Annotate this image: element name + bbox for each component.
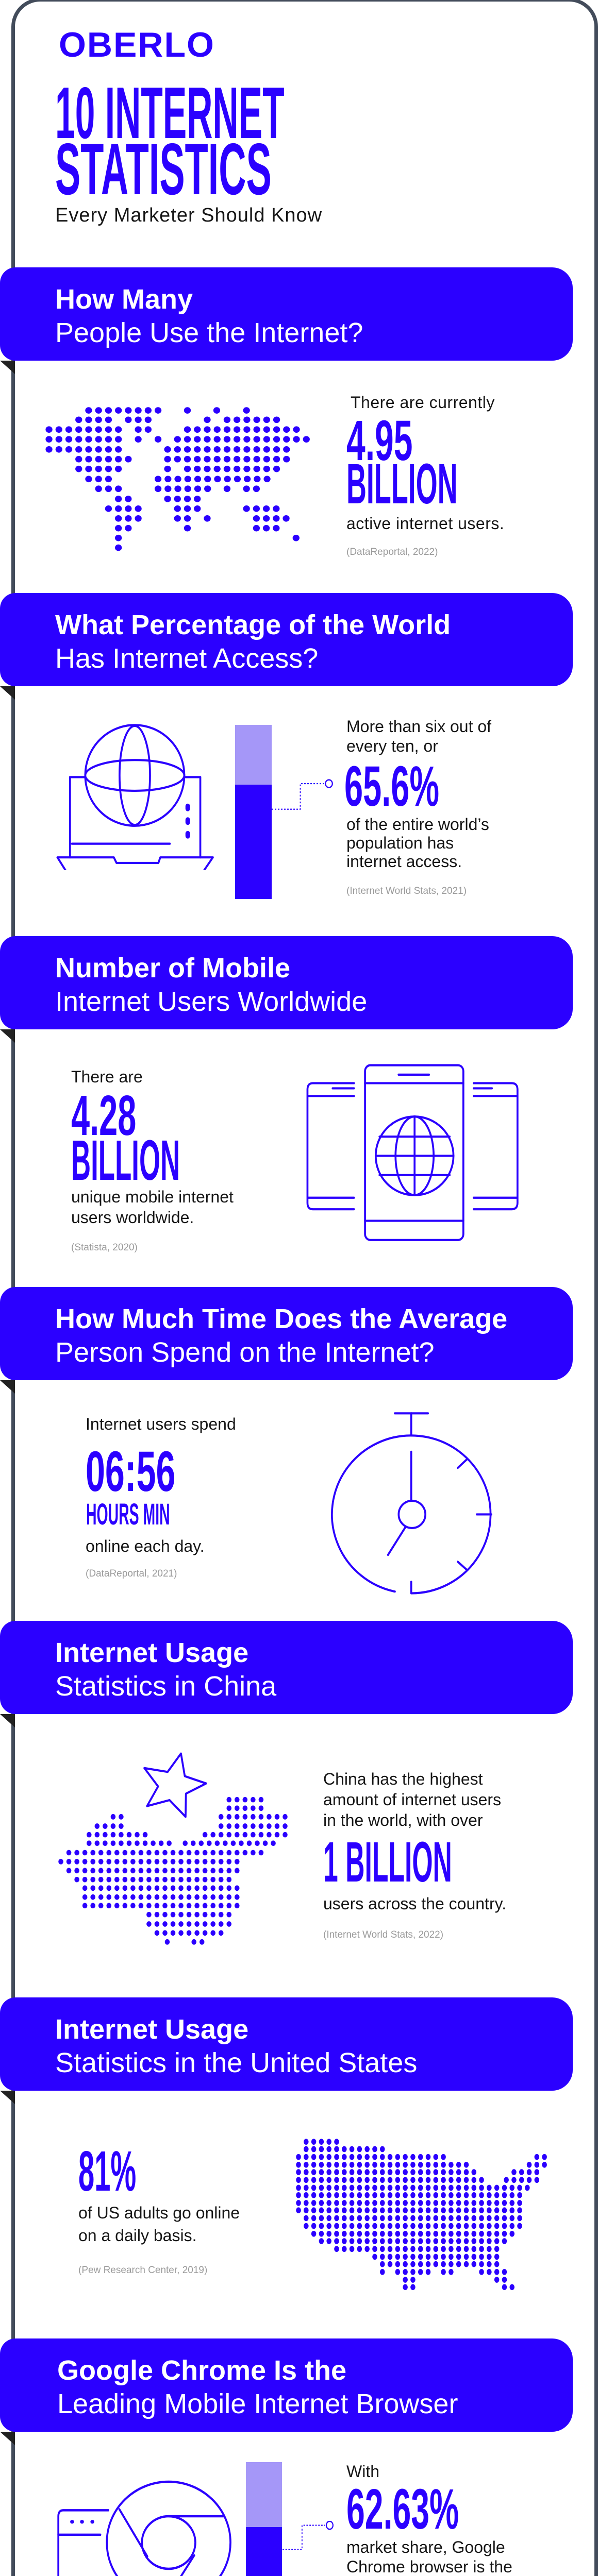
header: China: Internet Usage [55,1637,248,1668]
stat: 4.95 billion users: BILLION [346,452,458,516]
stat: 1 billion China: 1 BILLION [323,1831,452,1894]
stat: 4.95 billion users [346,393,504,557]
connector line [272,779,333,810]
header: Chrome: Google Chrome Is the [57,2355,346,2386]
stat: 1 billion China: in the world, with over [323,1811,483,1829]
stat: 06:56: Internet users spend [86,1415,236,1433]
icon: browser with chrome logo [57,2480,231,2576]
stat: 4.95 billion users: There are currently [351,393,495,412]
stat: 06:56: HOURS MIN [86,1498,170,1531]
stat: 62.63% [346,2462,512,2576]
title [55,72,285,210]
stat: 81%: on a daily basis. [78,2226,196,2245]
header: mobile users [0,936,573,1029]
header: time spent: How Much Time Does the Average [55,1303,507,1334]
header: time spent [0,1287,573,1380]
stat: 62.63%: Chrome browser is the [346,2557,512,2576]
header: Chrome: Leading Mobile Internet Browser [57,2388,458,2419]
header: percentage with access [0,593,573,686]
icon: laptop with globe [56,724,214,870]
header: China: Statistics in China [55,1671,276,1702]
stat: 62.63%: 62.63% [346,2478,459,2541]
header: mobile users: Number of Mobile [55,953,290,984]
stat: 62.63%: With [346,2462,379,2481]
header: percentage with access: What Percentage of the World [55,609,451,640]
stat: 81%: 81% [78,2140,136,2203]
title: STATISTICS [55,128,272,210]
header: United States: Statistics in the United States [55,2047,417,2078]
header: how many people: How Many [55,284,193,315]
stat: 65.6%: population has [346,834,454,852]
icon: stopwatch [331,1412,492,1595]
stat: 06:56: online each day. [86,1537,205,1555]
title: 10 INTERNET [55,72,285,154]
stat: 81%: of US adults go online [78,2204,240,2222]
stat: 06:56 [86,1415,236,1579]
stat: 65.6%: More than six out of [346,717,491,736]
stat: 65.6%: every ten, or [346,737,438,755]
header: time spent: Person Spend on the Internet? [55,1337,435,1368]
stat: 4.28 billion mobile: users worldwide. [71,1208,194,1227]
icon: China dot map with star [58,1753,288,1945]
header: percentage with access: Has Internet Access? [55,643,318,674]
stat: 65.6%: 65.6% [344,755,439,818]
stat: 1 billion China [323,1770,506,1940]
stat: 1 billion China: amount of internet users [323,1790,501,1809]
stat: 4.95 billion users: 4.95 [346,409,412,472]
stat: 4.28 billion mobile: BILLION [71,1129,180,1192]
logo: OBERLO [59,25,215,64]
subtitle: Every Marketer Should Know [55,205,322,226]
header: Chrome [0,2338,573,2432]
stat: 65.6%: of the entire world’s [346,815,489,834]
stat: 65.6%: internet access. [346,852,462,871]
stat: 81%: (Pew Research Center, 2019) [78,2265,207,2276]
bar: 62.63% [246,2462,282,2576]
stat: 4.95 billion users: (DataReportal, 2022) [346,547,438,557]
stat: 1 billion China: China has the highest [323,1770,483,1788]
stat: 4.28 billion mobile: (Statista, 2020) [71,1242,138,1253]
stat: 81% [78,2140,240,2276]
stat: 4.28 billion mobile: 4.28 [71,1084,136,1147]
stat: 4.95 billion users: active internet users. [346,514,504,533]
stat: 4.28 billion mobile: There are [71,1067,143,1086]
icon: US dot map [296,2139,547,2291]
connector line [283,2521,334,2550]
header: United States: Internet Usage [55,2014,248,2045]
icon: dotted world map [45,407,310,551]
stat: 06:56: (DataReportal, 2021) [86,1568,177,1579]
stat: 65.6%: (Internet World Stats, 2021) [346,886,467,896]
stat: 4.28 billion mobile: unique mobile internet [71,1188,234,1206]
bar: 65.6% [235,725,272,899]
header: how many people [0,267,573,361]
stat: 06:56: 06:56 [86,1440,175,1503]
stat: 1 billion China: users across the country. [323,1894,506,1913]
header: how many people: People Use the Internet? [55,317,363,348]
stat: 65.6% [344,717,492,896]
header: mobile users: Internet Users Worldwide [55,986,367,1017]
stat: 62.63%: market share, Google [346,2538,505,2556]
icon: phones with globe [306,1064,519,1241]
stat: 4.28 billion mobile [71,1067,234,1253]
header: United States [0,1997,573,2091]
stat: 1 billion China: (Internet World Stats, 2022) [323,1929,443,1940]
header: China [0,1621,573,1714]
icon: star [144,1753,206,1817]
